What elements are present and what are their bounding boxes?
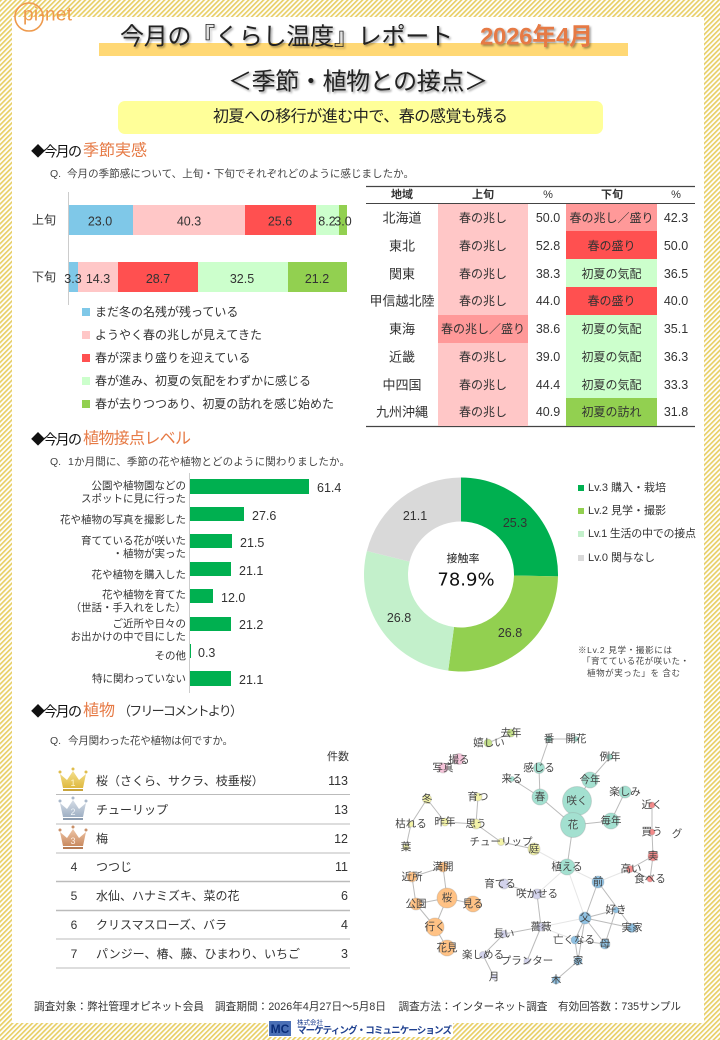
network cluster: spring flowers <box>502 732 641 875</box>
row 6: クリスマスローズ、バラ <box>96 917 227 932</box>
row: 北海道 <box>382 210 688 226</box>
row 7 <box>71 946 348 961</box>
network cluster: last year <box>473 726 522 749</box>
network cluster: family <box>551 875 643 986</box>
row: late month bars: 32.5 <box>230 272 254 286</box>
row: 東海: 春の兆し／盛り <box>441 321 525 336</box>
legend: contact level: Lv.2 見学・撮影 <box>588 503 666 517</box>
network cluster: family: 前 <box>593 875 603 888</box>
question 3: 今月関わった花や植物は何ですか。 <box>68 734 233 747</box>
network cluster: cherry blossoms: 近所 <box>402 870 423 883</box>
row label: early: 上旬 <box>32 213 56 227</box>
icon: bronze crown: 3 <box>70 836 76 846</box>
bar labels: その他 <box>154 649 186 662</box>
row: 中四国 <box>382 377 688 392</box>
row 4: 11 <box>335 860 348 874</box>
table header: 地域 <box>391 187 413 201</box>
row: 東海: 38.6 <box>536 322 560 336</box>
network cluster: fruit: 高い <box>620 862 642 875</box>
legend: contact level <box>578 480 696 564</box>
company logo: 株式会社 <box>297 1018 324 1026</box>
row 3 <box>96 832 348 846</box>
section heading: plants <box>31 702 243 720</box>
network cluster: tulip and garden: 育つ <box>468 790 488 803</box>
network cluster: fruit <box>620 799 666 885</box>
row: early month bars: 3.0 <box>334 214 352 228</box>
company logo: MC <box>271 1022 290 1036</box>
donut chart: contact rate: 21.1 <box>403 509 427 523</box>
donut centre label: 接触率 <box>446 551 480 565</box>
network cluster: last year: 嬉しい <box>473 736 505 749</box>
section heading: seasonal feeling: ◆今月の <box>31 144 82 160</box>
ranking table: 件数 <box>327 750 349 763</box>
row: 東北: 50.0 <box>664 239 688 253</box>
table header: % <box>671 189 681 201</box>
logo: pi-net <box>15 3 73 31</box>
bar labels: 花や植物を育てた <box>102 588 186 601</box>
row: 中四国: 初夏の気配 <box>581 377 642 392</box>
legend: seasonal feeling: まだ冬の名残が残っている <box>95 304 238 319</box>
section heading: plant contact level <box>31 430 191 448</box>
note: 植物が実った」を 含む <box>587 668 680 678</box>
row: 中四国: 春の兆し <box>459 378 507 392</box>
question 2: Q. <box>50 456 61 468</box>
title: 2026年4月 <box>480 24 593 50</box>
network cluster: fruit: 食べる <box>634 873 666 885</box>
survey footer: 調査対象：弊社管理オピネット会員 <box>34 1000 204 1013</box>
icon: gold crown <box>58 768 88 791</box>
row: early month bars: 8.2 <box>318 214 336 228</box>
legend: seasonal feeling: ようやく春の兆しが見えてきた <box>95 327 262 342</box>
row: late month bars: 14.3 <box>86 272 110 286</box>
question 1: Q. <box>50 168 61 180</box>
network cluster: cherry blossoms: 見る <box>462 898 484 910</box>
network cluster: tulip and garden <box>395 790 540 855</box>
section heading: plant contact level: ◆今月の <box>31 432 82 448</box>
legend: contact level: Lv.3 購入・栽培 <box>588 480 666 494</box>
row: 甲信越北陸: 春の盛り <box>587 293 636 308</box>
headline banner <box>118 101 603 134</box>
row: 中四国: 33.3 <box>664 378 688 392</box>
bar labels: 育てている花が咲いた <box>81 534 186 547</box>
network cluster: tulip and garden: 枯れる <box>395 817 427 830</box>
donut chart: contact rate: 25.3 <box>503 516 527 530</box>
network cluster: roses and growing: 長い <box>494 928 514 940</box>
network cluster: spring flowers: 毎年 <box>600 814 622 827</box>
bar values: 27.6 <box>252 509 276 523</box>
network cluster: family: 実家 <box>622 921 643 934</box>
logo: pi-net: pi-net <box>23 4 73 26</box>
row: 中四国: 44.4 <box>536 378 560 392</box>
donut chart: contact rate <box>364 478 558 672</box>
row 1: 113 <box>328 774 348 788</box>
company logo <box>268 1018 453 1037</box>
bar values: 61.4 <box>317 481 341 495</box>
note: 「育てている花が咲いた・ <box>582 656 689 666</box>
network cluster: fruit: 近く <box>642 799 662 811</box>
row: 近畿 <box>389 349 688 364</box>
network cluster: photo: 写真 <box>432 761 454 774</box>
subtitle: ＜季節・植物との接点＞ <box>228 68 488 96</box>
row 6: 4 <box>341 918 348 932</box>
bar labels: ご近所や日々の <box>112 617 186 630</box>
bars <box>190 479 309 686</box>
note <box>578 645 689 678</box>
row: 甲信越北陸: 40.0 <box>664 294 688 308</box>
co-occurrence network <box>395 726 683 986</box>
row label: late: 下旬 <box>32 270 56 284</box>
row: 東海: 東海 <box>389 322 415 336</box>
bar chart: plant interactions <box>60 473 341 693</box>
network cluster: cherry blossoms: 満開 <box>432 861 454 873</box>
network cluster: tulip and garden: 思う <box>466 818 486 830</box>
question 3: Q. <box>50 735 61 747</box>
section heading: seasonal feeling: 季節実感 <box>83 142 147 160</box>
network cluster: tulip and garden: チューリップ <box>470 836 533 848</box>
section heading: plants: 植物 <box>83 702 115 720</box>
row: 近畿: 春の兆し <box>459 350 507 364</box>
network cluster: roses and growing: 薔薇 <box>530 920 552 933</box>
row 7: パンジー、椿、藤、ひまわり、いちご <box>96 946 300 961</box>
row: 九州沖縄: 春の兆し <box>459 405 507 419</box>
bar labels: 特に関わっていない <box>92 673 186 685</box>
donut chart: contact rate: 26.8 <box>498 626 522 640</box>
survey footer: 調査期間：2026年4月27日～5月8日 <box>215 1000 386 1013</box>
network cluster: family: 好き <box>606 903 626 916</box>
network cluster: tulip and garden: 冬 <box>422 792 433 805</box>
row 3: 梅 <box>96 832 108 846</box>
legend: contact level: Lv.0 関与なし <box>588 551 655 564</box>
row: late month bars <box>64 262 347 292</box>
row 1: 桜（さくら、サクラ、枝垂桜） <box>96 774 264 788</box>
row: 東北: 春の盛り <box>587 238 636 253</box>
row: 北海道: 50.0 <box>536 211 560 225</box>
survey footer: 調査方法：インターネット調査 <box>398 1000 548 1013</box>
network cluster: fruit: 買う <box>642 826 662 838</box>
row: 東北: 52.8 <box>536 239 560 253</box>
company logo: マーケティング・コミュニケーションズ <box>297 1024 452 1036</box>
bar labels: スポットに見に行った <box>81 492 186 505</box>
row 6 <box>71 917 348 932</box>
icon: gold crown: 1 <box>70 778 76 788</box>
row: early month bars: 40.3 <box>177 214 201 228</box>
bar values: 21.1 <box>239 564 263 578</box>
icon: silver crown: 2 <box>70 807 76 817</box>
network cluster: spring flowers: 春 <box>535 791 546 803</box>
row: 中四国: 中四国 <box>382 378 422 392</box>
network cluster: family: 木 <box>551 974 562 986</box>
row: 東海 <box>389 321 688 336</box>
row: 関東 <box>389 266 688 282</box>
row: 北海道: 春の兆し <box>459 211 507 225</box>
row: 北海道: 北海道 <box>382 210 422 226</box>
network cluster: cherry blossoms: 桜 <box>442 891 453 904</box>
row: 東海: 35.1 <box>664 322 688 336</box>
bar labels: 花や植物を購入した <box>92 568 186 581</box>
network cluster: spring flowers: 楽しみ <box>609 785 641 798</box>
row 4 <box>71 860 348 874</box>
network cluster: spring flowers: 番 <box>544 733 555 745</box>
regional table <box>366 186 695 426</box>
donut centre label: 78.9% <box>437 570 495 590</box>
survey footer <box>34 1000 681 1013</box>
row 4: つつじ <box>96 860 132 874</box>
network cluster: roses and growing: 咲かせる <box>516 887 558 900</box>
network cluster: roses and growing <box>462 877 558 983</box>
bar values: 12.0 <box>221 591 245 605</box>
bar values: 21.1 <box>239 673 263 687</box>
bar values <box>198 481 341 687</box>
row 5: 6 <box>341 889 348 903</box>
network cluster: spring flowers: 咲く <box>566 794 588 807</box>
network cluster: last year: 去年 <box>500 726 522 739</box>
network cluster: tulip and garden: 昨年 <box>434 815 456 828</box>
row: 甲信越北陸: 甲信越北陸 <box>369 294 435 308</box>
row 6: 6 <box>71 918 78 932</box>
stacked bar chart: early and late month <box>32 192 352 305</box>
network cluster: cherry blossoms: 花見 <box>436 941 458 954</box>
network cluster: cherry blossoms <box>402 861 484 956</box>
network cluster: roses and growing: 月 <box>489 971 499 983</box>
row: 九州沖縄 <box>376 404 688 420</box>
legend: seasonal feeling: 春が去りつつあり、初夏の訪れを感じ始めた <box>95 396 334 411</box>
network cluster: spring flowers: 植える <box>551 860 583 873</box>
network cluster: spring flowers: 花 <box>568 818 579 831</box>
row: 近畿: 初夏の気配 <box>581 349 642 364</box>
icon: bronze crown <box>58 826 88 849</box>
network cluster: spring flowers: 感じる <box>523 761 555 774</box>
row: 甲信越北陸 <box>369 293 688 308</box>
section heading: plants: ◆今月の <box>31 704 82 720</box>
network cluster: tulip and garden: 葉 <box>401 840 412 853</box>
question 2: 1か月間に、季節の花や植物とどのように関わりましたか。 <box>68 455 350 468</box>
network cluster: spring flowers: 開花 <box>566 732 587 745</box>
network cluster: family: 家 <box>573 954 584 967</box>
headline banner: 初夏への移行が進む中で、春の感覚も残る <box>213 108 508 126</box>
section heading: plants: （フリーコメントより） <box>118 704 243 718</box>
row: 東北: 春の兆し <box>459 239 507 253</box>
network cluster: fruit: 実 <box>648 849 659 862</box>
row: 九州沖縄: 初夏の訪れ <box>581 404 642 419</box>
row 3: 12 <box>334 832 348 846</box>
legend: seasonal feeling: 春が進み、初夏の気配をわずかに感じる <box>95 373 311 388</box>
row: early month bars <box>69 205 352 235</box>
row: 近畿: 36.3 <box>664 350 688 364</box>
row 2: 13 <box>334 803 348 817</box>
legend: contact level: Lv.1 生活の中での接点 <box>588 526 696 540</box>
network cluster: photo: 撮る <box>448 753 470 766</box>
bar values: 21.2 <box>239 618 263 632</box>
row: 東北 <box>389 238 688 254</box>
table header <box>391 187 681 201</box>
table header: 下旬 <box>601 187 623 201</box>
network cluster: family: 母 <box>600 938 611 950</box>
icon: silver crown <box>58 796 88 820</box>
bar values: 0.3 <box>198 646 215 660</box>
row: 甲信越北陸: 春の兆し <box>459 294 507 308</box>
network cluster: tulip and garden: 庭 <box>529 842 540 855</box>
table header: % <box>543 189 553 201</box>
legend: seasonal feeling <box>82 304 334 411</box>
question 1: 今月の季節感について、上旬・下旬でそれぞれどのように感じましたか。 <box>67 167 414 180</box>
row: 関東: 春の兆し <box>459 267 507 281</box>
row: 九州沖縄: 31.8 <box>664 405 688 419</box>
donut centre label <box>437 551 495 590</box>
row: 関東: 初夏の気配 <box>581 266 642 281</box>
row: 関東: 36.5 <box>664 267 688 281</box>
row: 東海: 初夏の気配 <box>581 321 642 336</box>
row 5: 5 <box>71 889 78 903</box>
row 7: 3 <box>341 947 348 961</box>
note: ※Lv.2 見学・撮影には <box>578 645 672 655</box>
ranking table <box>56 750 350 968</box>
row: 九州沖縄: 九州沖縄 <box>376 404 428 420</box>
row 5: 水仙、ハナミズキ、菜の花 <box>96 888 240 903</box>
row 2 <box>96 803 348 817</box>
bar values: 21.5 <box>240 536 264 550</box>
network cluster: roses and growing: 育てる <box>484 877 516 890</box>
table header: 上旬 <box>472 187 494 201</box>
row: early month bars: 23.0 <box>88 214 112 228</box>
network cluster: spring flowers: 今年 <box>580 773 600 786</box>
row: 近畿: 近畿 <box>389 350 415 364</box>
row 2: チューリップ <box>96 803 168 817</box>
network cluster: family: 亡くなる <box>553 933 595 946</box>
row: 関東: 38.3 <box>536 267 560 281</box>
row 7: 7 <box>71 947 78 961</box>
network cluster: roses and growing: プランター <box>501 955 553 967</box>
bar labels: （世話・手入れをした） <box>70 601 186 614</box>
network cluster: photo <box>432 753 470 774</box>
network cluster: cherry blossoms: 公園 <box>406 898 426 910</box>
network cluster: cherry blossoms: 行く <box>424 920 446 933</box>
row: 北海道: 春の兆し／盛り <box>569 210 654 225</box>
section heading: seasonal feeling <box>31 142 147 160</box>
donut chart: contact rate: 26.8 <box>387 611 411 625</box>
title <box>99 24 628 56</box>
section heading: plant contact level: 植物接点レベル <box>83 430 191 448</box>
network edges <box>406 733 653 980</box>
bar labels: 公園や植物園などの <box>92 479 186 492</box>
row: late month bars: 3.3 <box>64 272 82 286</box>
bar labels: お出かけの中で目にした <box>70 630 186 643</box>
network cluster: spring flowers: 来る <box>502 773 522 785</box>
row: late month bars: 28.7 <box>146 272 170 286</box>
row: 甲信越北陸: 44.0 <box>536 294 560 308</box>
network isolated word: グ <box>672 827 683 840</box>
legend: seasonal feeling: 春が深まり盛りを迎えている <box>95 350 250 365</box>
row: early month bars: 25.6 <box>268 214 292 228</box>
network cluster: spring flowers: 例年 <box>600 750 620 763</box>
row 4: 4 <box>71 860 78 874</box>
row 5 <box>71 888 348 903</box>
row: 近畿: 39.0 <box>536 350 560 364</box>
survey footer: 有効回答数：735サンプル <box>558 1000 681 1013</box>
bar labels <box>60 479 186 685</box>
title: 今月の『くらし温度』レポート <box>120 24 453 50</box>
row: 九州沖縄: 40.9 <box>536 405 560 419</box>
bar labels: 花や植物の写真を撮影した <box>60 513 186 526</box>
row 1 <box>96 774 348 788</box>
row: 東北: 東北 <box>389 238 415 254</box>
table cell colours <box>438 204 657 426</box>
network cluster: roses and growing: 楽しめる <box>462 948 504 961</box>
row: 北海道: 42.3 <box>664 211 688 225</box>
row: 関東: 関東 <box>389 266 415 282</box>
bar labels: ・植物が実った <box>112 547 186 560</box>
network cluster: family: 父 <box>580 912 591 924</box>
row: late month bars: 21.2 <box>305 272 329 286</box>
